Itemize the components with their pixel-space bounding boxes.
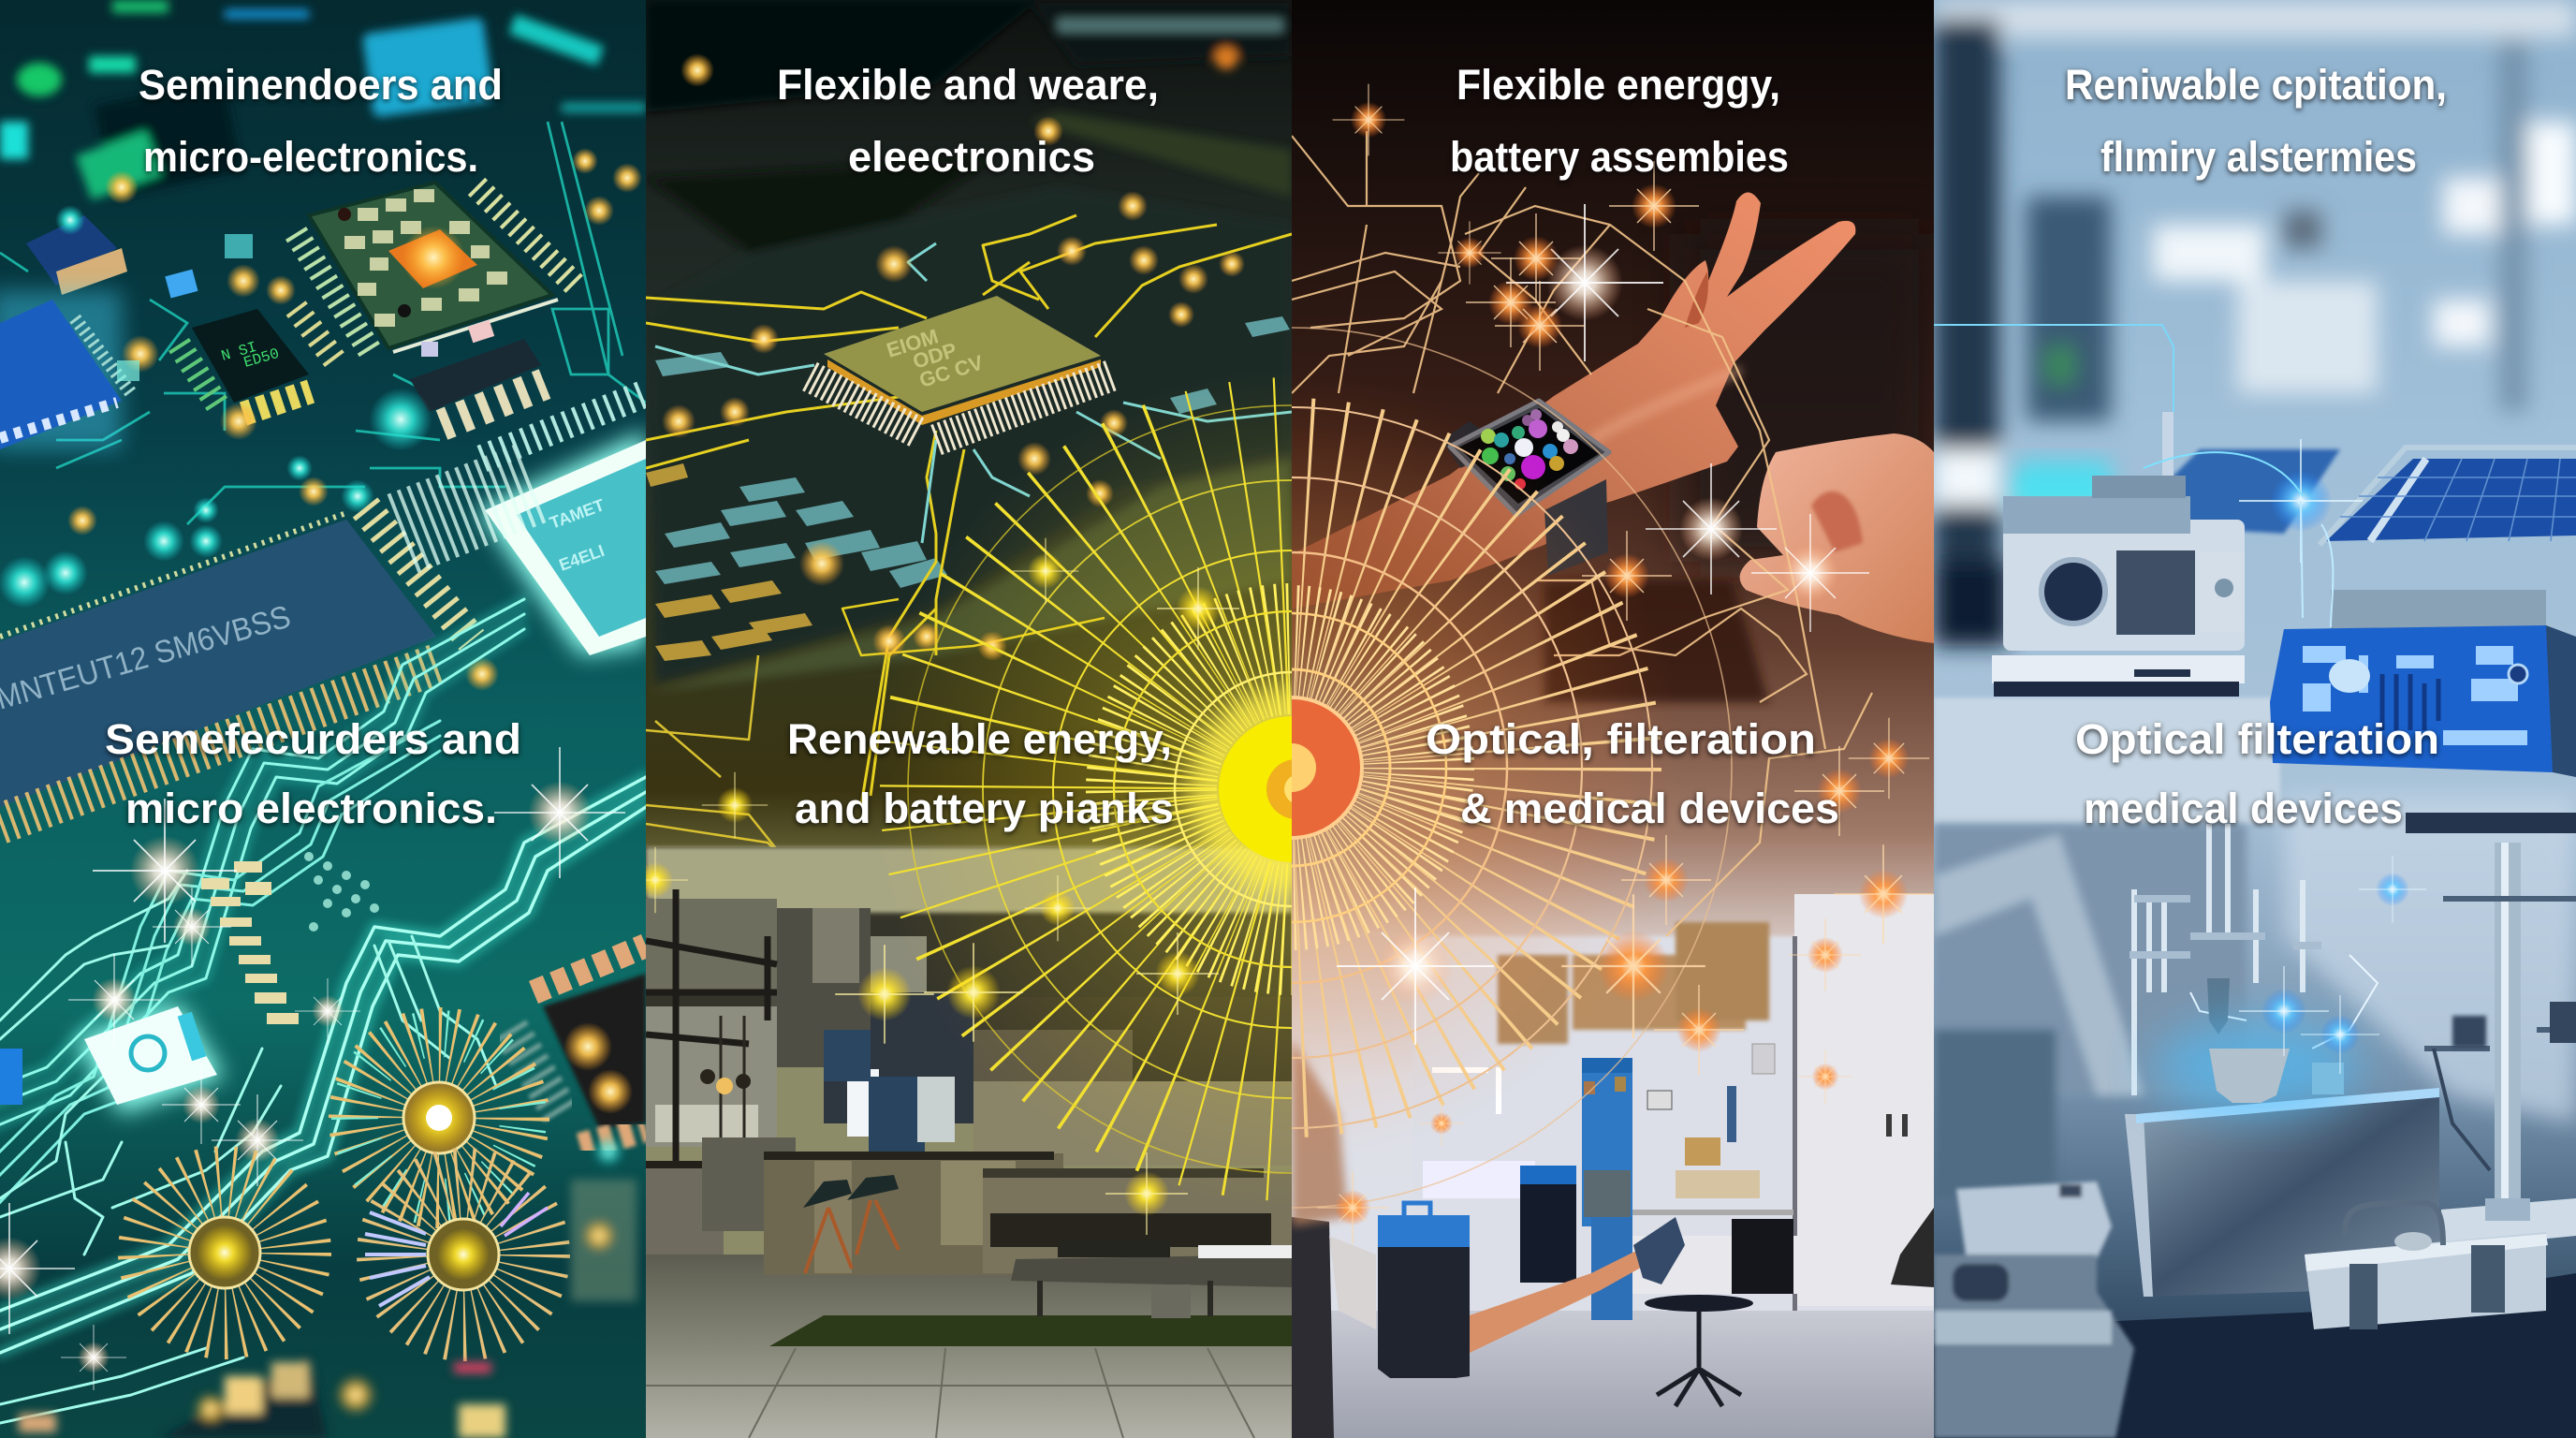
heading: panel 2 upper: eleectronics	[848, 133, 1095, 181]
heading: panel 2 lower: Renewable energy,	[787, 715, 1172, 763]
dark background glow	[1685, 234, 1934, 562]
chip: green processor with orange core	[296, 183, 575, 352]
heading: panel 3 lower: & medical devices	[1460, 785, 1839, 832]
heading: panel 4 upper	[2065, 61, 2447, 181]
foreground right box	[2305, 1203, 2548, 1329]
heading: panel 4 upper: flımiry alstermies	[2100, 133, 2417, 181]
raised hand with fingers	[1292, 192, 1855, 609]
starburst two	[154, 1181, 296, 1324]
chip: black logic chip: N SI	[219, 339, 258, 365]
glowing white-cyan chip: TAMET	[548, 495, 607, 533]
chip: DIP with white legs	[410, 320, 545, 425]
dark blurred board planes at top	[646, 0, 1292, 693]
glowing white-cyan chip	[402, 393, 646, 655]
heading: panel 3 upper: battery assembies	[1450, 133, 1789, 181]
bowl with blue glow	[2153, 966, 2379, 1114]
white counter shelf	[1934, 697, 2280, 824]
heading: panel 3 lower	[1426, 715, 1839, 832]
lower arm reaching to blue machine	[1470, 1217, 1685, 1353]
room: wall, panels, cupboards	[1413, 894, 1934, 1311]
heading: panel 1 upper	[139, 61, 503, 181]
blue sparkles and light lines	[1934, 325, 2426, 923]
heading: panel 2 upper	[777, 61, 1159, 181]
heading: panel 3 lower: Optical, filteration	[1426, 715, 1816, 763]
blue circuit instrument	[2270, 590, 2576, 777]
amber trace nodes	[662, 53, 1245, 661]
orange sun rays	[852, 328, 1732, 1208]
starburst three	[365, 1183, 548, 1326]
heading: panel 3 upper: Flexible energgy,	[1456, 61, 1780, 109]
seated person shape at lower left	[1292, 1039, 1376, 1438]
glowing white-cyan chip: E4ELI	[557, 541, 607, 575]
blue and black bin	[1378, 1203, 1470, 1378]
main island counter and stools	[764, 1152, 1292, 1275]
blurred equipment background	[1934, 796, 2576, 1198]
panel: flexible energy and optical medical devices	[852, 0, 1934, 1438]
bench table	[1011, 1240, 1292, 1318]
floor	[646, 1255, 1292, 1438]
glowing white component	[75, 1002, 225, 1114]
ceiling band and back wall	[646, 847, 1292, 1166]
circuit grid lines upper	[0, 122, 646, 524]
dark blurred chip bottom right	[0, 946, 646, 1147]
smartwatch	[1442, 401, 1609, 576]
yellow and teal traces around chip	[646, 215, 1292, 889]
panel: semiconductors and micro-electronics	[0, 0, 646, 1438]
heading: panel 1 lower	[105, 715, 521, 832]
retort stand right	[2406, 813, 2576, 1249]
bright circuit traces	[0, 599, 646, 1423]
large blue memory chip with marking	[0, 507, 472, 824]
equipment on back wall and counter	[1423, 1044, 1816, 1294]
main gold chip: EIOM	[884, 324, 941, 362]
left shelving and side counter	[646, 889, 796, 1297]
right edge easel	[1891, 1208, 1934, 1287]
panel: flexible electronics and renewable energy	[622, 0, 1713, 1438]
main gold chip: GC CV	[916, 350, 986, 392]
heading: panel 1 lower: micro electronics.	[125, 785, 497, 832]
pad array	[201, 861, 299, 1024]
solar panels	[2125, 448, 2576, 545]
blurred laboratory background	[1934, 0, 2576, 646]
dot array	[304, 852, 379, 932]
panel: renewable capitation and optical filtration medical devices	[1934, 0, 2576, 1438]
orange network traces	[1292, 131, 1872, 936]
dark shadow panel under arm	[1544, 580, 1769, 702]
heading: panel 2 upper: Flexible and weare,	[777, 61, 1159, 109]
second hand at right edge	[1740, 433, 1934, 643]
small glowing dots and pads	[0, 148, 642, 691]
amber pad arrays	[646, 463, 812, 661]
chip: black logic chip: ED50	[242, 345, 281, 372]
heading: panel 3 upper	[1450, 61, 1789, 181]
central nozzle	[2207, 978, 2230, 1034]
heading: panel 1 lower: Semefecurders and	[105, 715, 521, 763]
dark blue cabinet	[1520, 1166, 1576, 1283]
sparkles	[1317, 84, 1933, 1243]
teal pad arrays	[655, 316, 1290, 588]
white optical instrument	[1992, 412, 2245, 697]
heading: panel 2 lower	[787, 715, 1174, 832]
main gold chip	[810, 296, 1114, 440]
yellow sun rays	[871, 368, 1713, 1211]
starburst one	[345, 1024, 533, 1211]
floor	[1292, 1311, 1934, 1438]
floor tile lines	[646, 1348, 1292, 1438]
heading: panel 4 lower: medical devices	[2084, 785, 2403, 832]
heading: panel 4 lower	[2075, 715, 2439, 832]
heading: panel 1 upper: micro-electronics.	[143, 133, 478, 181]
main gold chip: ODP	[910, 338, 959, 374]
foreground blurred instruments	[1934, 1181, 2134, 1438]
chip: small blue capacitor block	[26, 215, 127, 295]
yellow sparkles	[622, 538, 1239, 1235]
sparkles on traces	[0, 747, 625, 1390]
solution tubes and nozzles	[2130, 824, 2378, 1095]
heading: panel 4 lower: Optical filteration	[2075, 715, 2439, 763]
chip: black logic chip	[179, 308, 338, 414]
office chair	[1645, 1295, 1753, 1406]
blurred foreground board bottom	[19, 1137, 637, 1438]
large blue memory chip with marking: MNTEUT12 SM6VBSS	[0, 599, 295, 717]
blue cylinder machine	[1582, 1058, 1632, 1320]
heading: panel 2 lower: and battery pianks	[795, 785, 1174, 832]
grass strip	[769, 1315, 1292, 1346]
chip: large blue at left edge	[0, 290, 131, 449]
blurred upper board components	[0, 0, 646, 200]
bottom dark bench	[1934, 1273, 2576, 1438]
heading: panel 1 upper: Seminendoers and	[139, 61, 503, 109]
metal box	[2125, 1088, 2443, 1297]
heading: panel 4 upper: Reniwable cpitation,	[2065, 61, 2447, 109]
